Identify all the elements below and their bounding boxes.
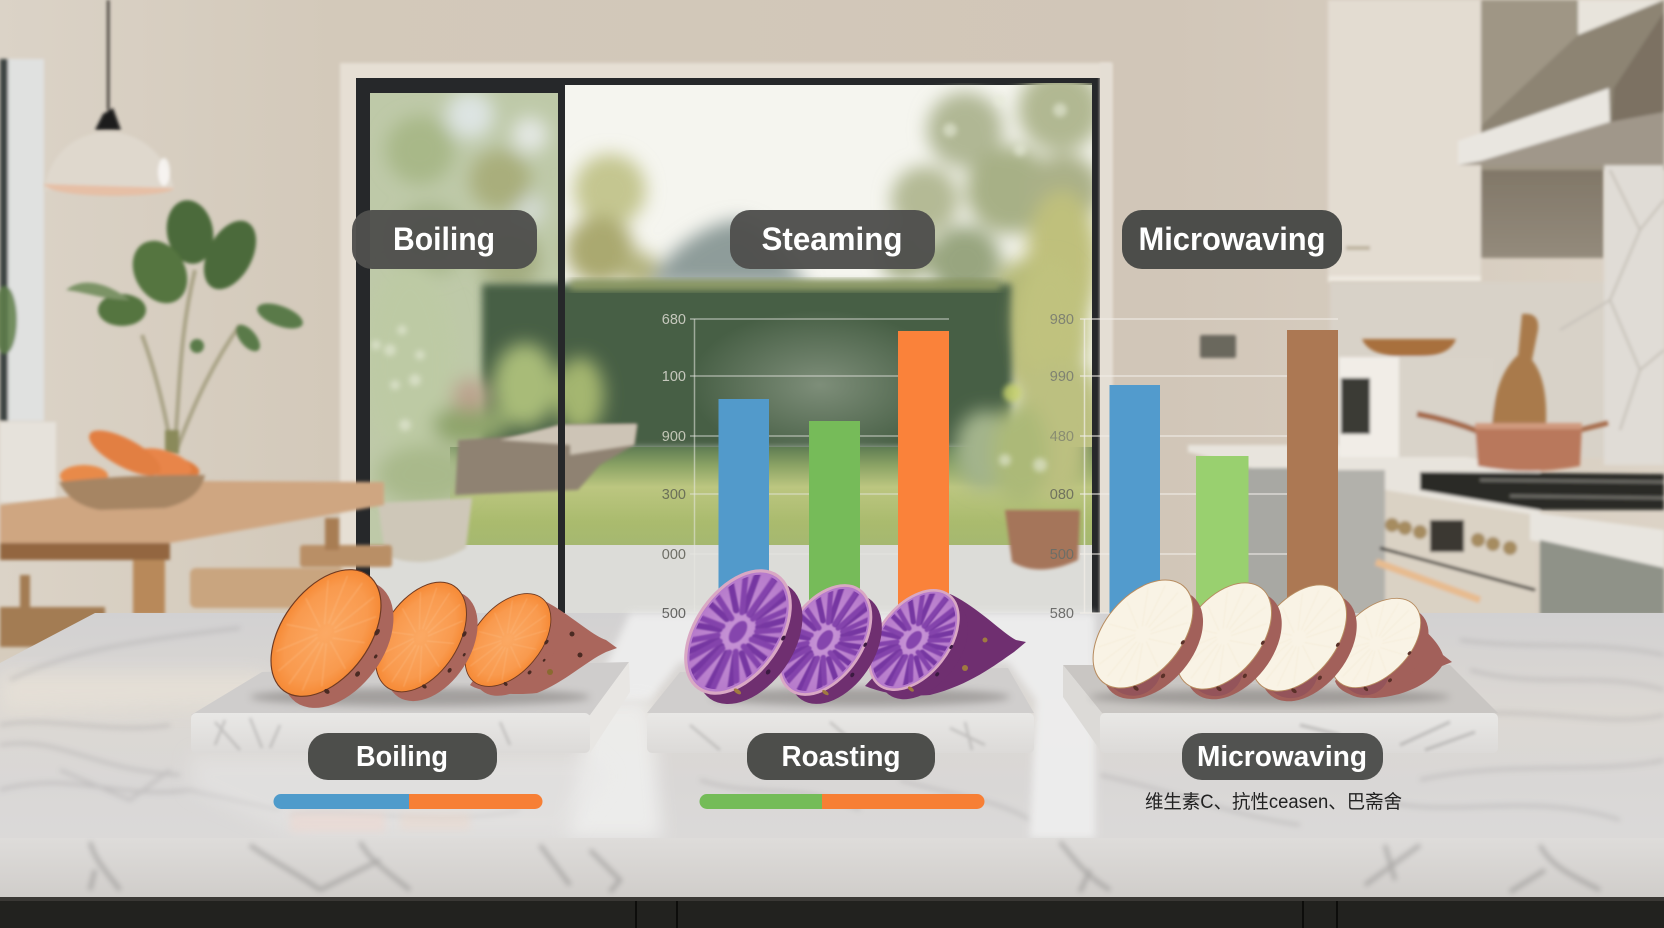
left window [0,59,56,502]
marble backsplash [1330,165,1664,465]
wooden bowl on microwave [1362,339,1456,356]
axis labels: 000 [662,547,686,563]
bar: blue [1110,385,1160,613]
pill label: Boiling: Boiling [356,741,448,773]
bar chart: left [662,312,949,622]
axis labels: 480 [1050,429,1074,445]
axis labels: 980 [1050,312,1074,328]
pill heading: Boiling [352,210,537,269]
dark base below counter [0,897,1664,928]
bar: brown [1287,330,1338,613]
orange sweet potato slices [247,549,617,729]
bar: blue [718,399,769,613]
kitchen counter and appliances [1188,314,1664,615]
axis labels: 580 [1050,606,1074,622]
bar: light green [1196,456,1248,613]
axis labels: 500 [1050,547,1074,563]
slab reflections [191,755,610,838]
pill heading: Steaming: Steaming [762,221,902,257]
nutrient caption: 维生素C、抗性ceasen、巴斋舍 [1145,791,1402,813]
cabinets and range hood [1328,0,1664,282]
marble slab: middle [647,668,1034,753]
pill label: Microwaving [1182,733,1383,780]
pill label: Roasting [747,733,935,780]
bar: orange [898,331,949,613]
cutting board [1492,314,1546,425]
potted plant behind table [66,196,306,454]
axis labels: 900 [662,429,686,445]
marble slab: left [191,662,630,753]
axis labels: 100 [662,369,686,385]
axis labels: 500 [662,606,686,622]
axis labels [662,312,686,622]
pill label: Roasting: Roasting [782,741,900,773]
pill label: Microwaving: Microwaving [1197,741,1367,773]
axis labels: 990 [1050,369,1074,385]
wall socket [1200,335,1236,358]
axis labels: 300 [662,487,686,503]
stove [1420,472,1664,510]
axis labels: 680 [662,312,686,328]
pendant lamp [44,0,174,196]
pill label: Boiling [308,733,497,780]
right countertop [1530,512,1664,568]
dining table with bowl of sweet potatoes [0,422,392,647]
microwave [1339,357,1494,457]
progress bar: blue and orange [274,794,542,809]
marble countertop [0,613,1664,900]
cream sweet potato slices [1072,561,1452,719]
bar chart: right [1050,312,1338,622]
axis labels: 080 [1050,487,1074,503]
progress bar: green and orange [700,794,985,809]
pill heading: Microwaving [1122,210,1342,269]
axis labels [1050,312,1074,622]
door frame and garden view [340,63,1112,623]
purple sweet potato slices [648,538,1026,727]
marble slab: right [1063,665,1498,753]
copper pot [1417,414,1608,471]
pill heading: Steaming [730,210,935,269]
bar: green [809,421,860,613]
pill heading: Boiling: Boiling [393,221,495,257]
kitchen background scene [0,0,1664,647]
pill heading: Microwaving: Microwaving [1138,221,1326,257]
